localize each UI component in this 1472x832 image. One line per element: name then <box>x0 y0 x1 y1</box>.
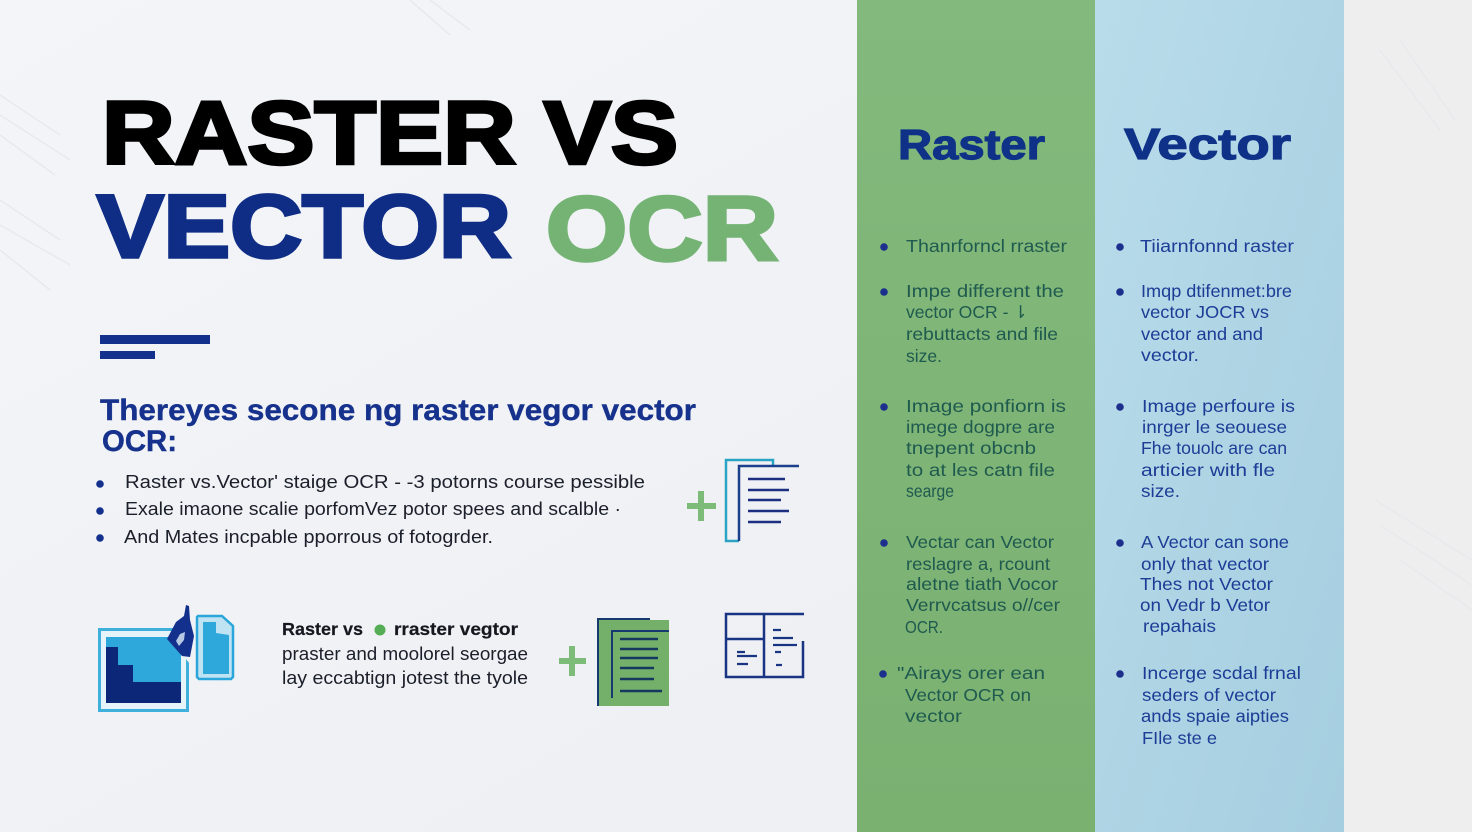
bullet list: raster points: Thanrforncl rraster <box>906 236 1067 256</box>
bullet list: vector points: Tiiarnfonnd raster <box>1140 236 1294 256</box>
bullet list: vector points: repahais <box>1143 616 1216 636</box>
bullet list: raster points: tnepent obcnb <box>906 438 1036 458</box>
bullet list: raster points: vector OCR - ⇂ <box>906 302 1028 322</box>
bullet list: vector points: FIle ste e <box>1142 728 1217 748</box>
heading: Vector: Vector <box>1124 120 1291 169</box>
bullet list: intro points <box>96 472 645 547</box>
accent bars <box>100 335 210 359</box>
icon: plus and green document <box>559 619 669 706</box>
bullet list: raster points: Verrvcatsus o//cer <box>906 595 1060 615</box>
panel: vector column <box>1095 0 1344 832</box>
bullet list: vector points: Image perfoure is <box>1142 396 1295 416</box>
bullet list: raster points: reslagre a, rcount <box>906 554 1050 574</box>
bullet list: raster points: vector <box>905 706 962 726</box>
subheading <box>100 394 697 458</box>
bullet list: vector points: Thes not Vector <box>1140 574 1273 594</box>
bullet list: vector points: vector JOCR vs <box>1141 302 1269 322</box>
bullet list: intro points: Exale imaone scalie porfomVez potor spees and scalble · <box>125 499 621 519</box>
bullet list: vector points: inrger le seouese <box>1142 417 1287 437</box>
bullet list: raster points: Vector OCR on <box>905 685 1031 705</box>
title: VECTOR <box>97 176 511 276</box>
title <box>97 82 778 280</box>
bullet list: raster points: "Airays orer ean <box>897 663 1045 683</box>
icon: plus and document <box>687 460 799 541</box>
bullet list: vector points: articier with fle <box>1141 460 1275 480</box>
bullet list: vector points: Imqp dtifenmet:bre <box>1141 281 1292 301</box>
bullet list: vector points: vector. <box>1141 345 1199 365</box>
bullet list: vector points: size. <box>1141 481 1180 501</box>
bullet list: vector points <box>1116 236 1301 748</box>
bullet list: raster points <box>879 236 1067 726</box>
bullet list: raster points: searge <box>906 481 954 501</box>
bullet list: raster points: Impe different the <box>906 281 1064 301</box>
bullet list: intro points: And Mates incpable pporrous of fotogrder. <box>124 527 493 547</box>
bullet list: raster points: size. <box>906 346 942 366</box>
bullet list: raster points: rebuttacts and file <box>906 324 1058 344</box>
bullet list: raster points: aletne tiath Vocor <box>906 574 1058 594</box>
panel: raster column <box>857 0 1095 832</box>
bullet list: vector points: vector and and <box>1141 324 1263 344</box>
icon: layout table <box>726 614 804 677</box>
title: RASTER VS <box>102 82 678 182</box>
bullet list: raster points: imege dogpre are <box>906 417 1055 437</box>
subheading: Thereyes secone ng raster vegor vector <box>100 394 697 427</box>
bullet list: vector points: ands spaie aipties <box>1141 706 1289 726</box>
subheading: OCR: <box>102 425 177 458</box>
text block: raster vs raster vegtor: praster and moolorel seorgae <box>282 644 528 664</box>
heading: Raster: Raster <box>898 121 1045 168</box>
text block: raster vs raster vegtor: lay eccabtign jotest the tyole <box>282 668 528 688</box>
bullet list: raster points: Vectar can Vector <box>906 532 1054 552</box>
bullet list: vector points: A Vector can sone <box>1141 532 1289 552</box>
title: OCR <box>546 179 778 280</box>
bullet list: raster points: to at les catn file <box>906 460 1055 480</box>
text block: raster vs raster vegtor <box>282 619 528 688</box>
bullet list: vector points: Incerge scdal frnal <box>1142 663 1301 683</box>
bullet list: intro points: Raster vs.Vector' staige OCR - -3 potorns course pessible <box>125 472 645 492</box>
bullet list: vector points: Fhe touolc are can <box>1141 438 1287 458</box>
text block: raster vs raster vegtor: Raster vs <box>282 619 363 639</box>
icon: green arrow dot <box>374 624 386 636</box>
icon: image with pen and file <box>100 605 233 710</box>
bullet list: raster points: Image ponfiorn is <box>906 396 1066 416</box>
text block: raster vs raster vegtor: rraster vegtor <box>394 619 518 639</box>
bullet list: vector points: on Vedr b Vetor <box>1140 595 1270 615</box>
bullet list: raster points: OCR. <box>905 617 943 637</box>
bullet list: vector points: seders of vector <box>1142 685 1276 705</box>
bullet list: vector points: only that vector <box>1141 554 1269 574</box>
